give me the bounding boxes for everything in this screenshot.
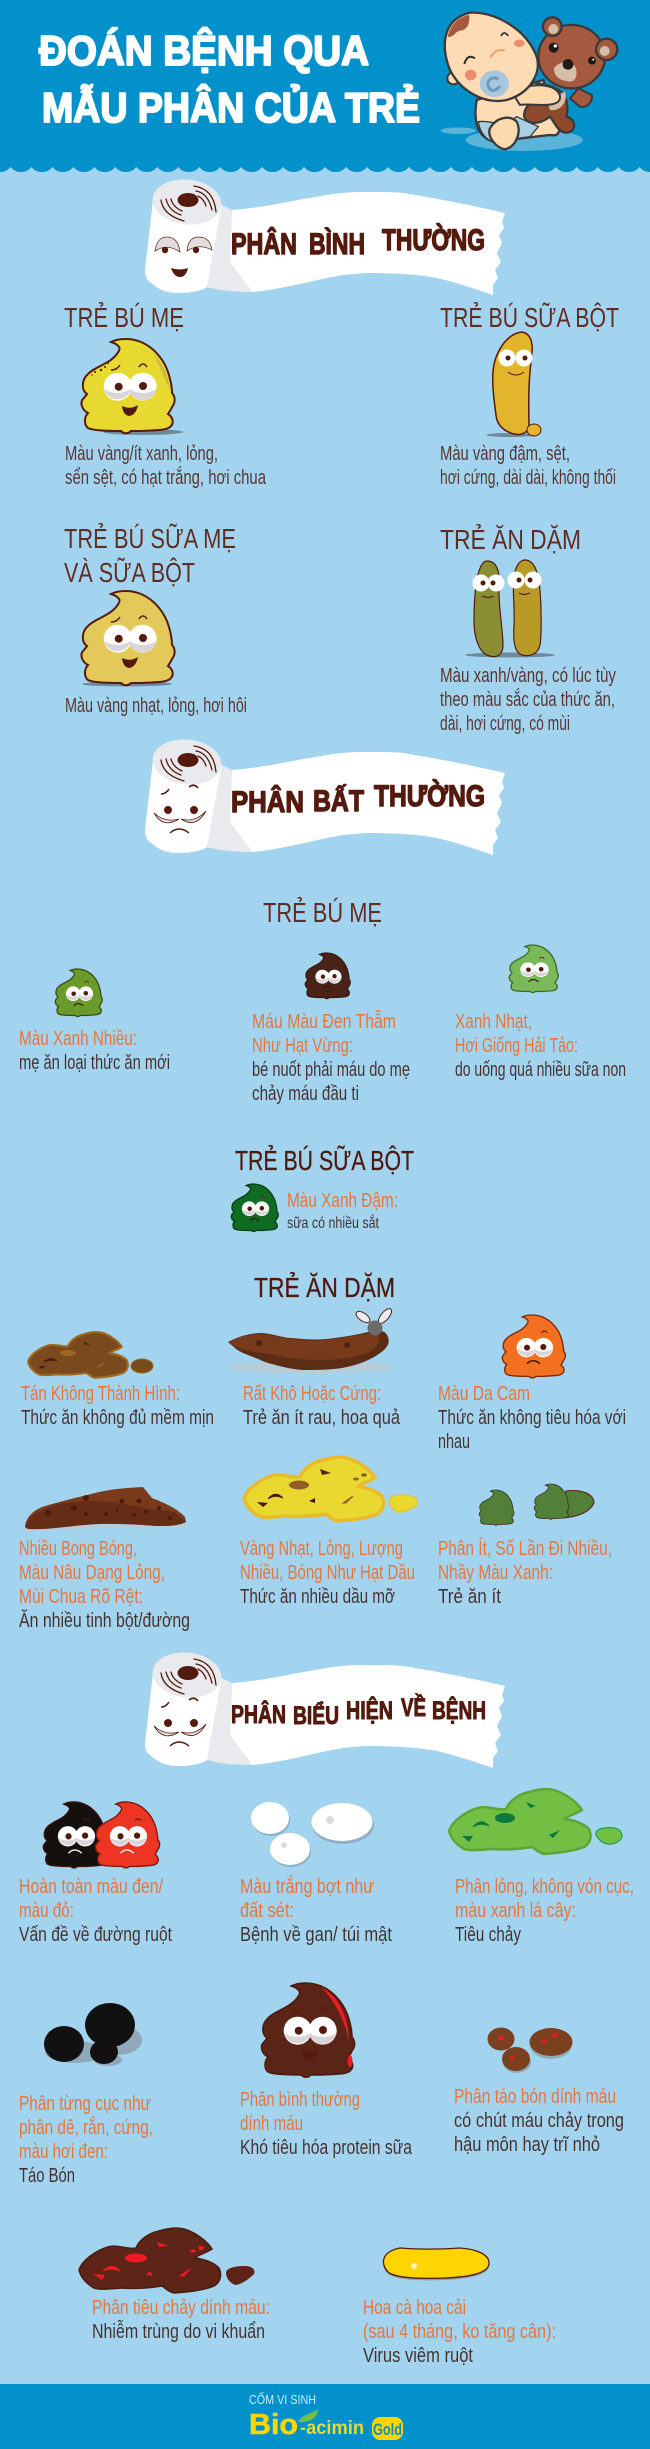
- text: tán không thành hình: [21, 1383, 214, 1429]
- icon: orange poo: [502, 1315, 565, 1378]
- text: vàng nhạt: Nhiều, Bóng Như Hạt Dầu: [240, 1562, 415, 1584]
- text: nhiều bong bóng: Màu Nâu Dạng Lỏng,: [19, 1562, 165, 1584]
- text: hoàn toàn màu đen/đỏ: màu đỏ:: [19, 1900, 74, 1922]
- text: phân từng cục: Táo Bón: [19, 2165, 75, 2187]
- text: hoàn toàn màu đen/đỏ: [19, 1876, 172, 1946]
- heading: trẻ bú sữa mẹ và sữa bột: TRẺ BÚ SỮA MẸ: [64, 522, 236, 554]
- text: màu trắng bợt: Bệnh về gan/ túi mật: [240, 1924, 392, 1946]
- logo: Bio-acimin Gold: -acimin: [300, 2418, 364, 2439]
- banner heading: BỆNH: [432, 1695, 486, 1725]
- icon: green diarrhea stool: [449, 1789, 622, 1854]
- banner heading: [231, 223, 485, 261]
- title: MẪU PHÂN CỦA TRẺ: [42, 83, 420, 131]
- banner heading: [231, 779, 485, 819]
- text: màu da cam: Màu Da Cam: [438, 1383, 530, 1405]
- text: rất khô hoặc cứng: [243, 1383, 401, 1429]
- text: trẻ bú sữa bột description: Màu vàng đậm, sệt,: [440, 443, 570, 465]
- text: phân từng cục: phân dê, rắn, cứng,: [19, 2116, 153, 2139]
- text: trẻ bú mẹ description: Màu vàng/ít xanh, lỏng,: [65, 443, 218, 465]
- banner heading: [231, 1693, 486, 1730]
- text: rất khô hoặc cứng: Trẻ ăn ít rau, hoa quả: [243, 1407, 401, 1429]
- icon: yellow capsule stool: [383, 2248, 489, 2280]
- header band: [0, 0, 650, 173]
- text: hoa cà hoa cải: (sau 4 tháng, ko tăng cân):: [363, 2321, 556, 2343]
- icon: two stick poos: [465, 560, 555, 658]
- text: máu màu đen thẫm: Như Hạt Vừng:: [252, 1035, 353, 1057]
- text: màu trắng bợt: Màu trắng bợt như: [240, 1875, 374, 1898]
- icon: red poo: [95, 1802, 160, 1868]
- text: phân từng cục: màu hơi đen:: [19, 2141, 108, 2163]
- text: rất khô hoặc cứng: Rất Khô Hoặc Cứng:: [243, 1383, 381, 1405]
- text: xanh nhạt: Hơi Giống Hải Tảo:: [455, 1035, 578, 1057]
- text: hoa cà hoa cải: [363, 2297, 556, 2367]
- logo: Bio-acimin Gold: Gold: [373, 2420, 402, 2439]
- text: xanh nhạt: [455, 1011, 626, 1081]
- logo: Bio-acimin Gold: Bio: [249, 2409, 298, 2441]
- icon: white clay stool: [251, 1802, 374, 1867]
- banner heading: BIỂU: [293, 1701, 339, 1730]
- banner: phân bình thường: [145, 176, 505, 295]
- text: máu màu đen thẫm: Máu Màu Đen Thẫm: [252, 1010, 396, 1033]
- text: phân bình thường dính máu: dính máu: [240, 2113, 303, 2135]
- banner heading: THƯỜNG: [374, 779, 485, 813]
- icon: small green stools: [479, 1484, 594, 1525]
- text: phân táo bón dính máu: hậu môn hay trĩ nhỏ: [454, 2134, 600, 2156]
- text: màu xanh nhiều: Màu Xanh Nhiều:: [19, 1028, 137, 1050]
- heading: trẻ bú mẹ: TRẺ BÚ MẸ: [64, 301, 184, 333]
- text: máu màu đen thẫm: bé nuốt phải máu do mẹ: [252, 1059, 410, 1081]
- heading: trẻ bú mẹ (bất thường): TRẺ BÚ MẸ: [263, 896, 382, 928]
- text: màu xanh đậm: Màu Xanh Đậm:: [287, 1190, 398, 1212]
- text: màu xanh đậm: sữa có nhiều sắt: [287, 1213, 379, 1232]
- text: nhiều bong bóng: [19, 1538, 190, 1632]
- text: phân lỏng không vón cục: màu xanh lá cây:: [455, 1900, 576, 1922]
- icon: stool with blood: [79, 2228, 255, 2293]
- banner heading: HIỆN: [346, 1695, 393, 1725]
- icon: brown poo with blood: [261, 1983, 355, 2077]
- text: vàng nhạt: [240, 1538, 415, 1608]
- text: trẻ ăn dặm description: dài, hơi cứng, có mùi: [440, 713, 570, 735]
- footer: [0, 2384, 650, 2449]
- icon: unformed brown stool: [28, 1332, 153, 1378]
- heading: trẻ bú sữa mẹ và sữa bột: VÀ SỮA BỘT: [64, 557, 195, 588]
- heading: trẻ ăn dặm (bất thường): TRẺ ĂN DẶM: [254, 1271, 395, 1303]
- icon: black pellets: [44, 2003, 142, 2066]
- icon: yellow poo: [81, 339, 183, 435]
- text: phân bình thường dính máu: Phân bình thường: [240, 2089, 360, 2111]
- text: phân tiêu chảy dính máu: Nhiễm trùng do vi khuẩn: [92, 2320, 265, 2343]
- text: phân từng cục: [19, 2093, 153, 2187]
- icon: pale yellow poo: [81, 591, 175, 686]
- text: màu xanh nhiều: [19, 1028, 170, 1074]
- banner heading: BÌNH: [309, 227, 365, 261]
- text: trẻ bú mẹ description: sển sệt, có hạt trắng, hơi chua: [65, 466, 267, 489]
- text: máu màu đen thẫm: [252, 1010, 410, 1105]
- text: nhiều bong bóng: Mùi Chua Rõ Rệt:: [19, 1586, 143, 1608]
- text: phân lỏng không vón cục: [455, 1876, 634, 1946]
- icon: light green poo: [509, 945, 558, 993]
- text: nhiều bong bóng: Nhiều Bong Bóng,: [19, 1538, 137, 1560]
- banner heading: PHÂN: [231, 785, 304, 819]
- text: nhiều bong bóng: Ăn nhiều tinh bột/đường: [19, 1609, 190, 1632]
- banner: phân bất thường: [145, 736, 505, 855]
- text: màu trắng bợt: [240, 1875, 392, 1946]
- icon: brown pellets with blood: [488, 2028, 572, 2073]
- icon: yellow oily stool: [244, 1457, 417, 1521]
- footer label: CỐM VI SINH: [249, 2392, 316, 2407]
- text: phân tiêu chảy dính máu: Phân tiêu chảy dính máu:: [92, 2297, 270, 2319]
- text: xanh nhạt: Xanh Nhạt,: [455, 1011, 532, 1033]
- heading: trẻ bú sữa bột (bất thường): TRẺ BÚ SỮA BỘT: [235, 1144, 414, 1176]
- text: trẻ bú mẹ description: [65, 443, 267, 489]
- banner heading: VỀ: [401, 1693, 426, 1722]
- banner heading: THƯỜNG: [382, 223, 485, 257]
- illustration: baby with teddy bear: [441, 13, 617, 151]
- text: màu xanh đậm: [287, 1190, 398, 1232]
- text: vàng nhạt: Thức ăn nhiều dầu mỡ: [240, 1586, 395, 1608]
- text: trẻ bú sữa bột description: [440, 443, 616, 489]
- icon: dark green poo: [231, 1184, 278, 1232]
- text: phân bình thường dính máu: Khó tiêu hóa protein sữa: [240, 2137, 413, 2159]
- text: hoa cà hoa cải: Hoa cà hoa cải: [363, 2297, 466, 2319]
- text: màu da cam: [438, 1383, 626, 1453]
- icon: tall yellow poo: [486, 332, 541, 437]
- text: hoàn toàn màu đen/đỏ: Vấn đề về đường ruột: [19, 1924, 172, 1946]
- text: tán không thành hình: Tán Không Thành Hình:: [21, 1383, 180, 1405]
- heading: trẻ bú sữa mẹ và sữa bột: [64, 522, 236, 588]
- text: hoàn toàn màu đen/đỏ: Hoàn toàn màu đen/: [19, 1876, 163, 1898]
- text: phân ít: [438, 1537, 612, 1608]
- text: phân táo bón dính máu: [454, 2086, 624, 2156]
- title: ĐOÁN BỆNH QUA: [39, 26, 369, 74]
- banner heading: PHÂN: [231, 227, 297, 261]
- title: [39, 26, 420, 131]
- text: trẻ ăn dặm description: [440, 665, 616, 735]
- banner heading: BẤT: [313, 784, 364, 818]
- text: phân lỏng không vón cục: Tiêu chảy: [455, 1924, 521, 1946]
- text: hoa cà hoa cải: Virus viêm ruột: [363, 2345, 473, 2367]
- heading: trẻ ăn dặm: TRẺ ĂN DẶM: [440, 523, 581, 555]
- text: pale yellow description: Màu vàng nhạt, lỏng, hơi hôi: [65, 695, 247, 717]
- icon: black poo: [43, 1802, 108, 1868]
- text: tán không thành hình: Thức ăn không đủ mềm mịn: [21, 1407, 214, 1429]
- text: màu trắng bợt: đất sét:: [240, 1900, 294, 1922]
- icon: long dry stool with fly: [228, 1307, 394, 1374]
- icon: dark brown poo: [305, 953, 350, 999]
- banner heading: PHÂN: [231, 1699, 286, 1729]
- text: phân bình thường dính máu: [240, 2089, 413, 2159]
- text: phân ít: Nhầy Màu Xanh:: [438, 1562, 553, 1584]
- text: phân tiêu chảy dính máu: [92, 2297, 270, 2343]
- text: phân từng cục: Phân từng cục như: [19, 2093, 151, 2115]
- icon: flat brown foamy stool: [24, 1487, 186, 1532]
- text: màu xanh nhiều: mẹ ăn loại thức ăn mới: [19, 1052, 170, 1074]
- logo: Bio-acimin Gold: [249, 2409, 403, 2441]
- text: màu da cam: nhau: [438, 1431, 470, 1453]
- text: vàng nhạt: Vàng Nhạt, Lỏng, Lượng: [240, 1538, 403, 1560]
- text: phân ít: Trẻ ăn ít: [438, 1586, 501, 1608]
- icon: green poo: [55, 969, 102, 1017]
- banner: phân biểu hiện về bệnh: [145, 1649, 505, 1768]
- text: máu màu đen thẫm: chảy máu đầu ti: [252, 1083, 359, 1105]
